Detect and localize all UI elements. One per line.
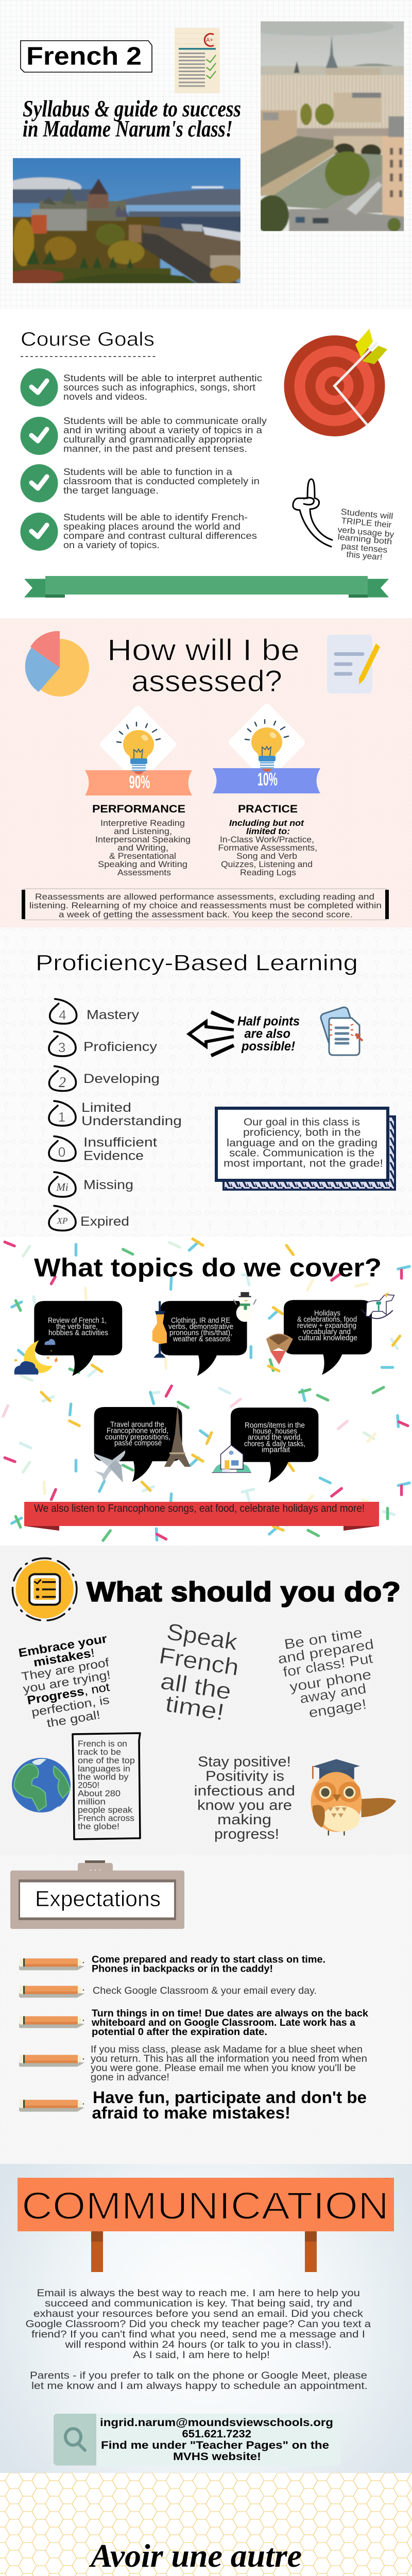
bubble: rooms: [231, 1408, 318, 1483]
text: embrace your mistakes: They are proof: [21, 1655, 110, 1683]
scale item: 2 Developing: [49, 1066, 160, 1091]
goal 1: Students will be able to interpret authentic: [63, 373, 262, 383]
bubble: travel: Travel around the: [110, 1421, 164, 1429]
column: performance: and Listening,: [114, 827, 172, 836]
icon: graded paper: [175, 28, 220, 93]
expectation 4: gone in advance!: [91, 2072, 169, 2083]
banner: red: We also listen to Francophone songs, eat food, celebrate holidays and more!: [34, 1502, 365, 1515]
scale item: 0 Insufficient Evidence: 0: [58, 1144, 65, 1160]
expectation 1: Phones in backpacks or in the caddy!: [92, 1963, 273, 1975]
callout: French facts: one of the top: [78, 1756, 135, 1765]
text: speak French: Speak: [165, 1618, 239, 1655]
section: expectations: [0, 1855, 412, 2164]
scale item: XP Expired: XP: [57, 1216, 67, 1226]
column: practice: Formative Assessments,: [218, 843, 317, 853]
text: be on time: your phone: [288, 1667, 372, 1694]
ribbon: green: [24, 576, 389, 598]
scale item: 3 Proficiency: [49, 1031, 158, 1056]
scale item: 4 Mastery: 4: [59, 1007, 66, 1023]
icon: owl: [311, 1759, 396, 1836]
text: half points are also possible: are also: [244, 1027, 290, 1041]
bubble: holidays: review + expanding: [297, 1322, 356, 1330]
icon: graded paper: A+: [206, 37, 213, 43]
text: email guidance: exhaust your resources before you send an email. Did you check: [33, 2308, 363, 2319]
column: performance: Interpersonal Speaking: [95, 835, 191, 844]
expectation 3: whiteboard and on Google Classroom. Late work has a: [91, 2017, 355, 2028]
arrow: half points: [189, 1012, 234, 1056]
bubble: holidays: [284, 1300, 372, 1375]
text: be on time: Be on time: [283, 1624, 363, 1652]
callout: our goal: most important, not the grade!: [224, 1158, 383, 1170]
callout: our goal: language and on the grading: [227, 1138, 377, 1149]
text: email guidance: let me know and I am always happy to schedule an appointment.: [31, 2380, 368, 2392]
bubble: travel: [94, 1407, 182, 1482]
goal 3: the target language.: [63, 485, 159, 496]
text: be on time: and prepared: [277, 1636, 375, 1667]
callout: French facts: track to be: [78, 1748, 121, 1757]
callout: French facts: people speak: [78, 1806, 133, 1815]
column: performance: PERFORMANCE: [92, 803, 185, 815]
bubble: travel: country prepositions,: [105, 1433, 170, 1442]
text: stay positive: making: [217, 1811, 271, 1827]
text: embrace your mistakes: mistakes !: [32, 1646, 96, 1669]
icon: dress mannequin: [152, 1301, 167, 1358]
section: assessment: [0, 618, 412, 927]
text: email guidance: Email is always the best way to reach me. I am here to help you: [37, 2287, 360, 2299]
callout: French facts: [73, 1733, 140, 1839]
callout: French facts: languages in: [78, 1764, 130, 1773]
section: course goals: [0, 309, 412, 618]
photo: Quebec City: [3, 157, 243, 285]
expectation 3: [19, 2008, 368, 2038]
column: practice: PRACTICE: [238, 803, 298, 815]
expectation 3: Turn things in on time! Due dates are always on the back: [92, 2008, 368, 2019]
contact box: [54, 2414, 340, 2466]
scale item: 2 Developing: 2: [59, 1075, 66, 1091]
column: practice: [213, 707, 320, 877]
column: performance: [85, 709, 192, 877]
goal 1: sources such as infographics, songs, short: [63, 382, 255, 393]
callout: our goal: Our goal in this class is: [244, 1117, 360, 1128]
scale item: 0 Insufficient Evidence: Insufficient: [83, 1136, 157, 1150]
subtitle: Syllabus & guide to success: [23, 96, 241, 122]
column: practice: Including but not: [229, 819, 305, 828]
expectation 5: afraid to make mistakes!: [92, 2104, 290, 2122]
bubble: clothing: weather & seasons: [173, 1335, 230, 1344]
expectation 2: Check Google Classroom & your email every day.: [93, 1985, 317, 1996]
contact box: ingrid.narum@moundsviewschools.org: [100, 2417, 333, 2429]
text: email guidance: Parents - if you prefer to talk on the phone or Google Meet, please: [30, 2370, 367, 2381]
column: practice: Song and Verb: [236, 852, 297, 861]
expectation 1: [19, 1954, 325, 1975]
bubble: clothing: Clothing, IR and RE: [171, 1317, 230, 1325]
icon: note and pencil: [327, 635, 380, 693]
column: practice: 10%: [258, 770, 278, 789]
bubble: rooms: chores & daily tasks,: [244, 1440, 305, 1448]
section: quote: [0, 2473, 412, 2576]
callout: French facts: the globe!: [78, 1822, 119, 1832]
goal 1: novels and videos.: [63, 392, 147, 402]
note: triple verb usage: TRIPLE their: [341, 516, 392, 530]
icon: checklist badge: [12, 1558, 77, 1620]
text: email guidance: friend? If you can't find what you need, send me a message and I: [31, 2329, 365, 2340]
banner: red: [24, 1502, 379, 1531]
text: embrace your mistakes: Embrace your: [18, 1632, 108, 1659]
scale item: 4 Mastery: [50, 999, 140, 1024]
callout: reassessments: [22, 889, 389, 920]
column: performance: & Presentational: [109, 852, 176, 861]
quote text: Avoir une autre: [89, 2537, 302, 2574]
scale item: 1 Limited Understanding: Understanding: [81, 1114, 182, 1128]
bubble: holidays: & celebrations, food: [297, 1315, 357, 1324]
text: stay positive: [194, 1754, 295, 1842]
bubble: holidays: vocabulary and: [303, 1328, 351, 1336]
text: email guidance: succeed and communication is key. That being said, try and: [45, 2298, 352, 2309]
goal 4: compare and contrast cultural differences: [63, 531, 257, 541]
text: stay positive: progress!: [214, 1826, 279, 1842]
scale item: 0 Insufficient Evidence: [49, 1136, 157, 1163]
expectation 3: potential 0 after the expiration date.: [92, 2026, 267, 2038]
goal 4: [21, 512, 257, 551]
note: triple verb usage: past tenses: [341, 541, 388, 555]
text: email guidance: will respond within 24 hours (or talk to you in class!).: [64, 2339, 332, 2350]
scale item: 1 Limited Understanding: [49, 1100, 182, 1128]
icon: airplane: [94, 1450, 125, 1483]
column: practice: Reading Logs: [240, 868, 296, 877]
bubble: review: Review of French 1,: [48, 1317, 107, 1325]
text: email guidance: As I said, I am here to help!: [133, 2349, 270, 2361]
contact box: 651.621.7232: [182, 2428, 251, 2440]
callout: reassessments: listening. Relearning of my choice and reassessments must be completed within: [29, 901, 382, 910]
expectation 5: Have fun, participate and don't be: [93, 2088, 367, 2107]
callout: French facts: 2050!: [78, 1781, 99, 1790]
note: triple verb usage: this year!: [346, 550, 383, 562]
scale item: XP Expired: Expired: [80, 1214, 129, 1229]
text: be on time: [277, 1624, 375, 1721]
callout: French facts: French is on: [78, 1739, 127, 1749]
bubble: review: [34, 1301, 122, 1376]
sign: Expectations: [10, 1860, 184, 1929]
text: half points are also possible: possible!: [241, 1039, 295, 1054]
scale item: 3 Proficiency: Proficiency: [83, 1040, 158, 1054]
expectation 4: you return. This has all the information you need from when: [91, 2053, 367, 2064]
column: practice: Quizzes, Listening and: [221, 860, 313, 869]
goal 4: Students will be able to identify French-: [63, 512, 248, 522]
icon: pointing hand: [293, 479, 332, 547]
bubble: rooms: around the world,: [248, 1434, 302, 1442]
expectation 2: [19, 1985, 317, 1998]
icon: snowman: [233, 1292, 256, 1322]
heading: Course Goals: Course Goals: [21, 329, 154, 350]
icon: house: [212, 1445, 251, 1473]
heading: How will I be assessed?: How will I be: [107, 634, 300, 667]
text: be on time: for class! Put: [282, 1650, 374, 1680]
text: speak French: French: [157, 1642, 241, 1681]
sign: Expectations: Expectations: [35, 1887, 161, 1911]
subtitle: [23, 96, 241, 142]
goal 2: [21, 416, 267, 455]
goal 3: classroom that is conducted completely in: [63, 476, 260, 486]
section: communication: [0, 2164, 412, 2473]
note: triple verb usage: verb usage by: [337, 525, 395, 539]
note: triple verb usage: [337, 507, 395, 562]
expectation 4: [19, 2044, 367, 2083]
section: what should you do: [0, 1546, 412, 1855]
column: performance: 90%: [129, 772, 150, 792]
scale item: 4 Mastery: Mastery: [87, 1008, 140, 1022]
scale item: Mi Missing: [49, 1172, 133, 1197]
column: performance: and Writing,: [117, 843, 168, 853]
goal 3: [21, 464, 260, 502]
heading: How will I be assessed?: [107, 634, 300, 698]
note: triple verb usage: learning both: [337, 532, 392, 547]
goal 2: Students will be able to communicate orally: [63, 416, 267, 426]
icon: pie chart: [25, 631, 89, 697]
expectation 1: Come prepared and ready to start class on time.: [92, 1954, 325, 1965]
goal 4: speaking places around the world and: [63, 521, 241, 532]
text: email guidance: Google Classroom? Did you check my teacher page? Can you text a: [26, 2318, 371, 2330]
contact box: Find me under "Teacher Pages" on the: [101, 2439, 329, 2451]
bubble: review: hobbies & activities: [48, 1329, 108, 1337]
heading: What topics do we cover?: What topics do we cover?: [34, 1253, 382, 1282]
text: stay positive: Positivity is: [205, 1768, 284, 1784]
callout: French facts: the world by: [78, 1773, 129, 1782]
photo: Paris skyline: [261, 21, 404, 231]
goal 4: on a variety of topics.: [63, 540, 160, 550]
scale item: 2 Developing: Developing: [83, 1072, 160, 1086]
text: stay positive: know you are: [197, 1797, 292, 1813]
icon: moon and clouds: [14, 1339, 58, 1375]
text: embrace your mistakes: the goal!: [46, 1708, 101, 1730]
column: performance: Speaking and Writing: [98, 860, 187, 869]
icon: crepe cone: [266, 1333, 293, 1365]
scale item: 1 Limited Understanding: Limited: [81, 1100, 131, 1115]
section: topics: [0, 1236, 412, 1546]
bubble: travel: Francophone world,: [107, 1427, 168, 1435]
text: half points are also possible: [237, 1014, 300, 1054]
text: speak French: all the: [159, 1668, 233, 1705]
scale item: 1 Limited Understanding: 1: [58, 1109, 65, 1125]
subtitle: in Madame Narum's class!: [23, 116, 233, 142]
goal 3: Students will be able to function in a: [63, 467, 233, 477]
title box: French 2: French 2: [26, 42, 142, 70]
sign: COMMUNICATION: COMMUNICATION: [22, 2184, 389, 2227]
scale item: Mi Missing: Missing: [83, 1178, 133, 1192]
icon: target with arrow: [284, 329, 387, 436]
callout: French facts: French across: [78, 1814, 134, 1823]
goal 2: manner, in the past and present tenses.: [63, 444, 247, 454]
column: performance: Interpretive Reading: [100, 819, 185, 828]
text: speak French: [157, 1618, 241, 1725]
text: embrace your mistakes: [18, 1632, 112, 1730]
text: be on time: away and: [299, 1681, 367, 1706]
heading: What should you do?: What should you do?: [87, 1577, 401, 1607]
expectation 4: If you miss class, please ask Madame for a blue sheet when: [91, 2044, 363, 2055]
bubble: review: the verb faire,: [56, 1323, 98, 1331]
column: practice: limited to:: [246, 827, 290, 836]
text: embrace your mistakes: Progress , not: [26, 1680, 111, 1707]
text: embrace your mistakes: perfection, is: [30, 1693, 110, 1719]
heading: How will I be assessed?: assessed?: [131, 665, 282, 698]
note: triple verb usage: Students will: [340, 507, 393, 521]
scale item: 0 Insufficient Evidence: Evidence: [83, 1149, 144, 1163]
column: performance: Assessments: [117, 868, 171, 877]
callout: reassessments: Reassessments are allowed performance assessments, excluding reading and: [35, 892, 374, 902]
contact box: MVHS website!: [173, 2451, 261, 2463]
sign: COMMUNICATION: [18, 2178, 394, 2272]
bubble: travel: passé composé: [114, 1439, 162, 1448]
bubble: clothing: pronouns (this/that),: [169, 1329, 232, 1337]
text: stay positive: infectious and: [194, 1783, 295, 1799]
icon: rocking horse: [362, 1292, 394, 1318]
bubble: rooms: Rooms/items in the: [245, 1421, 305, 1430]
bubble: rooms: imparfait: [262, 1446, 290, 1454]
icon: documents: [320, 1006, 363, 1055]
section: header: [0, 0, 412, 309]
column: practice: In-Class Work/Practice,: [220, 835, 314, 844]
goal 1: [21, 368, 262, 406]
icon: Eiffel Tower: [164, 1404, 191, 1467]
bubble: clothing: verbs, demonstrative: [168, 1323, 233, 1331]
expectation 5: [19, 2088, 367, 2122]
callout: French facts: About 280: [78, 1789, 121, 1798]
callout: our goal: [216, 1108, 395, 1190]
text: speak French: time!: [164, 1690, 226, 1725]
icon: magnifier: [65, 2429, 85, 2450]
goal 2: and in writing about a variety of topics in a: [63, 425, 263, 435]
bubble: holidays: Holidays: [314, 1310, 340, 1318]
text: be on time: engage!: [307, 1696, 368, 1721]
icon: globe: [12, 1758, 71, 1812]
callout: our goal: proficiency, both in the: [243, 1127, 360, 1139]
heading: Proficiency-Based Learning: Proficiency-Based Learning: [36, 950, 358, 976]
bubble: rooms: house, houses: [253, 1428, 297, 1436]
callout: our goal: scale. Communication is the: [229, 1148, 374, 1159]
text: half points are also possible: Half points: [237, 1014, 300, 1029]
text: stay positive: Stay positive!: [198, 1754, 291, 1770]
section: proficiency-based learning: [0, 927, 412, 1236]
callout: French facts: million: [78, 1797, 106, 1806]
goal 2: culturally and grammatically appropriate: [63, 434, 252, 445]
bubble: holidays: cultural knowledge: [298, 1334, 357, 1342]
expectation 4: you were gone. Please email me when you know you'll be: [91, 2062, 356, 2074]
bubble: clothing: [160, 1301, 247, 1376]
scale item: 3 Proficiency: 3: [58, 1040, 65, 1055]
scale item: Mi Missing: Mi: [56, 1181, 68, 1193]
scale item: XP Expired: [49, 1206, 129, 1230]
text: embrace your mistakes: you are trying!: [22, 1668, 112, 1696]
callout: reassessments: a week of getting the assessment back. You keep the second score.: [59, 910, 353, 919]
text: email guidance: [26, 2287, 371, 2392]
